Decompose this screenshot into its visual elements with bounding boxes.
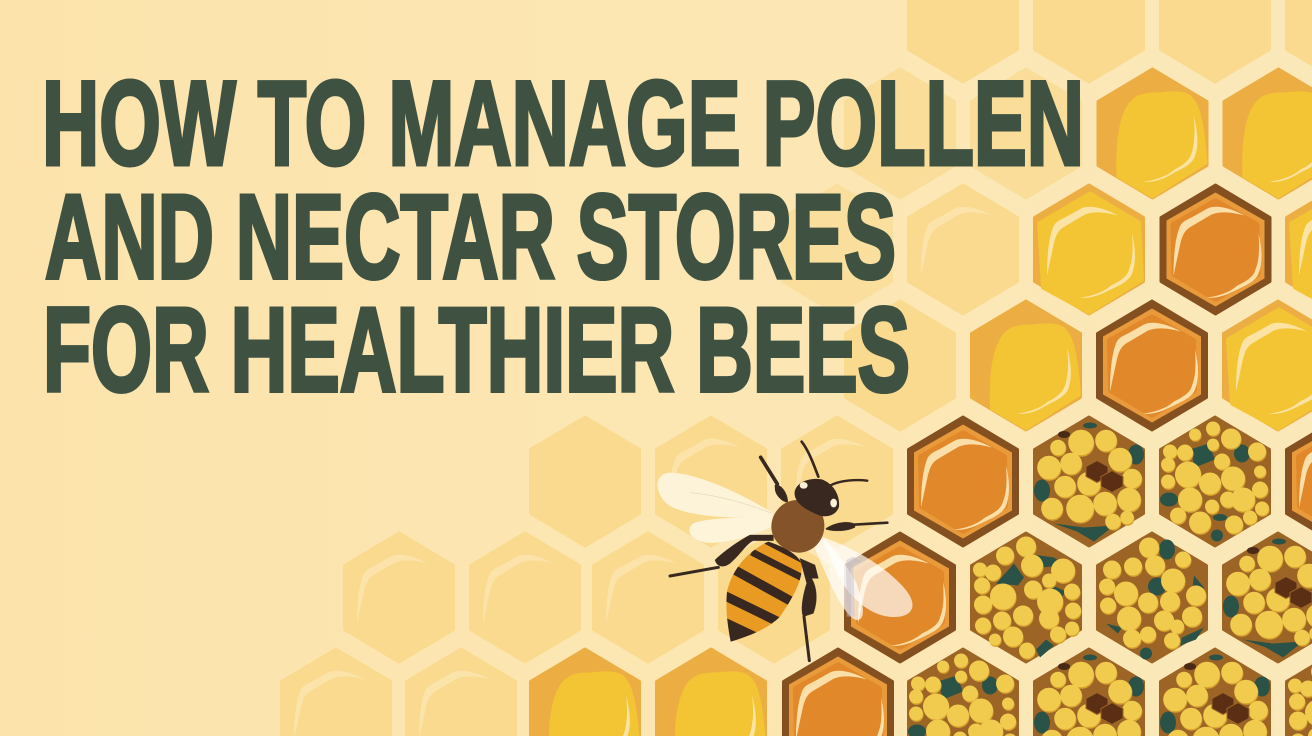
bee thorax	[771, 500, 824, 553]
bee head	[795, 442, 867, 516]
icon: honey bee	[658, 442, 912, 661]
honeycomb: bottom row of cells	[270, 640, 1312, 736]
bee abdomen	[726, 542, 802, 642]
bee right wings	[815, 537, 912, 620]
honeycomb: pollen-packed cells	[972, 417, 1312, 662]
bee legs	[670, 457, 887, 661]
honeycomb: capped orange honey cells	[846, 185, 1312, 662]
honeycomb: full nectar cells	[1034, 185, 1312, 430]
title	[42, 56, 1084, 417]
bee left wings	[658, 473, 773, 543]
honeycomb: partly filled nectar cells	[972, 69, 1312, 430]
honeycomb: pale empty cells	[344, 0, 1312, 662]
